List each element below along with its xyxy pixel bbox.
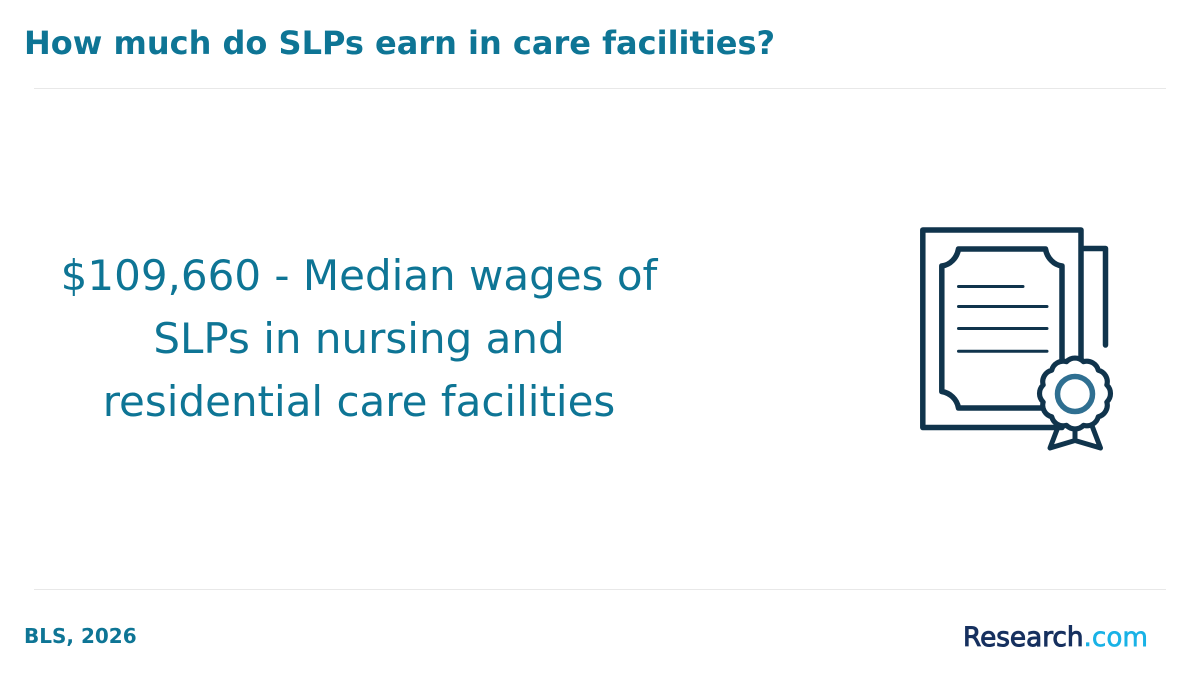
certificate inner border (942, 249, 1062, 408)
rosette centre ring (1058, 376, 1092, 412)
source note: BLS, 2026 (24, 624, 137, 648)
main statistic text: $109,660 - Median wages of (61, 251, 657, 300)
main statistic text: SLPs in nursing and (153, 314, 565, 363)
certificate outer frame (923, 230, 1106, 428)
rosette seal (1040, 358, 1110, 429)
icon: certificate with award ribbon (920, 227, 1114, 450)
title: How much do SLPs earn in care facilities? (24, 24, 775, 62)
main statistic text: residential care facilities (103, 377, 615, 426)
certificate text lines (958, 286, 1047, 351)
logo: Research.com: Research.com (963, 622, 1148, 653)
main statistic text (61, 251, 658, 426)
ribbon tails (1050, 427, 1100, 448)
